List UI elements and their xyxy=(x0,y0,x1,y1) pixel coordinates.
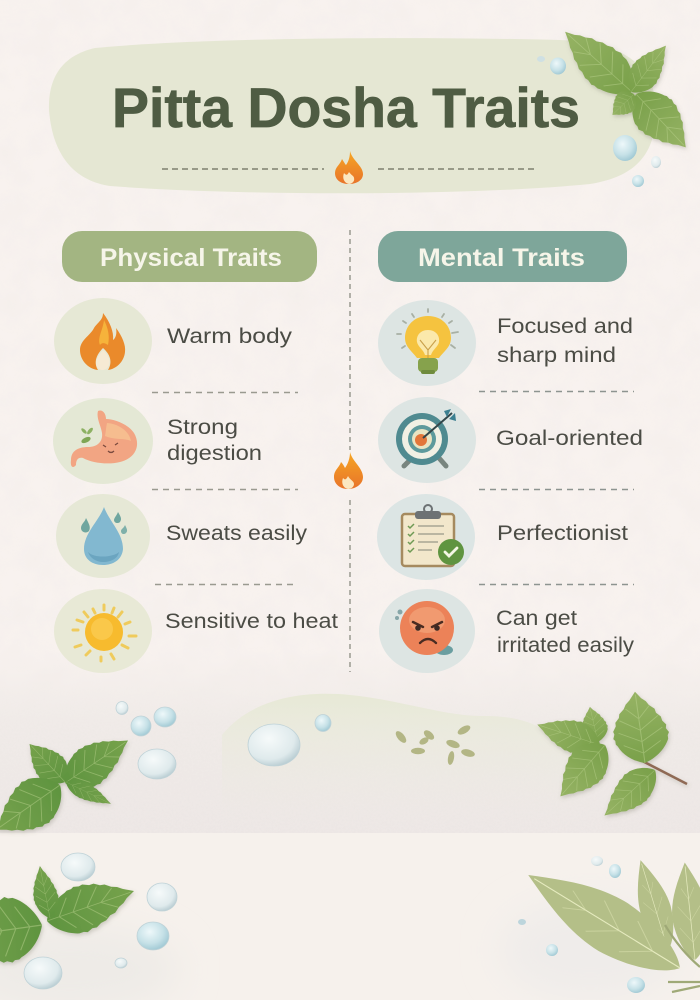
trait: can get irritated easily: irritated easily xyxy=(497,633,634,657)
icon: sun xyxy=(73,605,136,661)
trait: can get irritated easily xyxy=(379,589,634,673)
icon: target xyxy=(396,409,456,466)
physical traits heading: Physical Traits xyxy=(100,244,282,272)
trait: sweats easily: Sweats easily xyxy=(166,521,307,545)
trait: focused and sharp mind xyxy=(378,300,633,386)
title water drops xyxy=(537,56,661,187)
hill wash xyxy=(222,694,590,833)
title banner xyxy=(49,38,656,193)
trait: strong digestion: digestion xyxy=(167,441,262,465)
icon: flame xyxy=(80,313,125,370)
lower-left mint sprig xyxy=(0,724,139,850)
icon: stomach xyxy=(71,410,137,467)
trait: focused and sharp mind: Focused and xyxy=(497,314,633,338)
bottom-right pale leaves xyxy=(514,851,700,992)
upper-right mint sprig xyxy=(532,688,687,828)
title: Pitta Dosha Traits xyxy=(112,76,580,139)
mental traits heading: Mental Traits xyxy=(418,244,585,272)
trait: warm body: Warm body xyxy=(167,324,292,348)
trait: warm body xyxy=(54,298,292,384)
trait: strong digestion: Strong xyxy=(167,415,238,439)
trait: perfectionist xyxy=(377,494,628,580)
trait: focused and sharp mind: sharp mind xyxy=(497,343,616,367)
bottom-right water drops xyxy=(518,856,645,993)
physical traits heading xyxy=(62,231,317,282)
fennel seeds xyxy=(394,723,476,765)
center vertical divider xyxy=(349,230,351,672)
trait: perfectionist: Perfectionist xyxy=(497,521,628,545)
lower-left water drops xyxy=(116,702,331,779)
trait: strong digestion xyxy=(53,398,262,484)
panel: mental traits xyxy=(377,231,643,673)
icon: light bulb xyxy=(397,309,458,374)
title divider with flame xyxy=(162,151,538,184)
mental traits heading xyxy=(378,231,627,282)
icon: clipboard xyxy=(402,505,464,566)
title mint sprig xyxy=(551,16,700,163)
panel: physical traits xyxy=(53,231,338,673)
icon: water drop xyxy=(81,507,127,565)
trait: sensitive to heat xyxy=(54,589,338,673)
trait: goal-oriented xyxy=(378,397,643,483)
background xyxy=(0,709,700,1000)
icon: center flame xyxy=(334,452,363,489)
bottom-left mint sprig xyxy=(0,864,142,970)
trait: sweats easily xyxy=(56,494,307,578)
trait: can get irritated easily: Can get xyxy=(496,606,577,630)
icon: angry face xyxy=(395,601,454,655)
trait: goal-oriented: Goal-oriented xyxy=(496,426,643,450)
trait: sensitive to heat: Sensitive to heat xyxy=(165,609,338,633)
bottom-left water drops xyxy=(24,853,177,989)
